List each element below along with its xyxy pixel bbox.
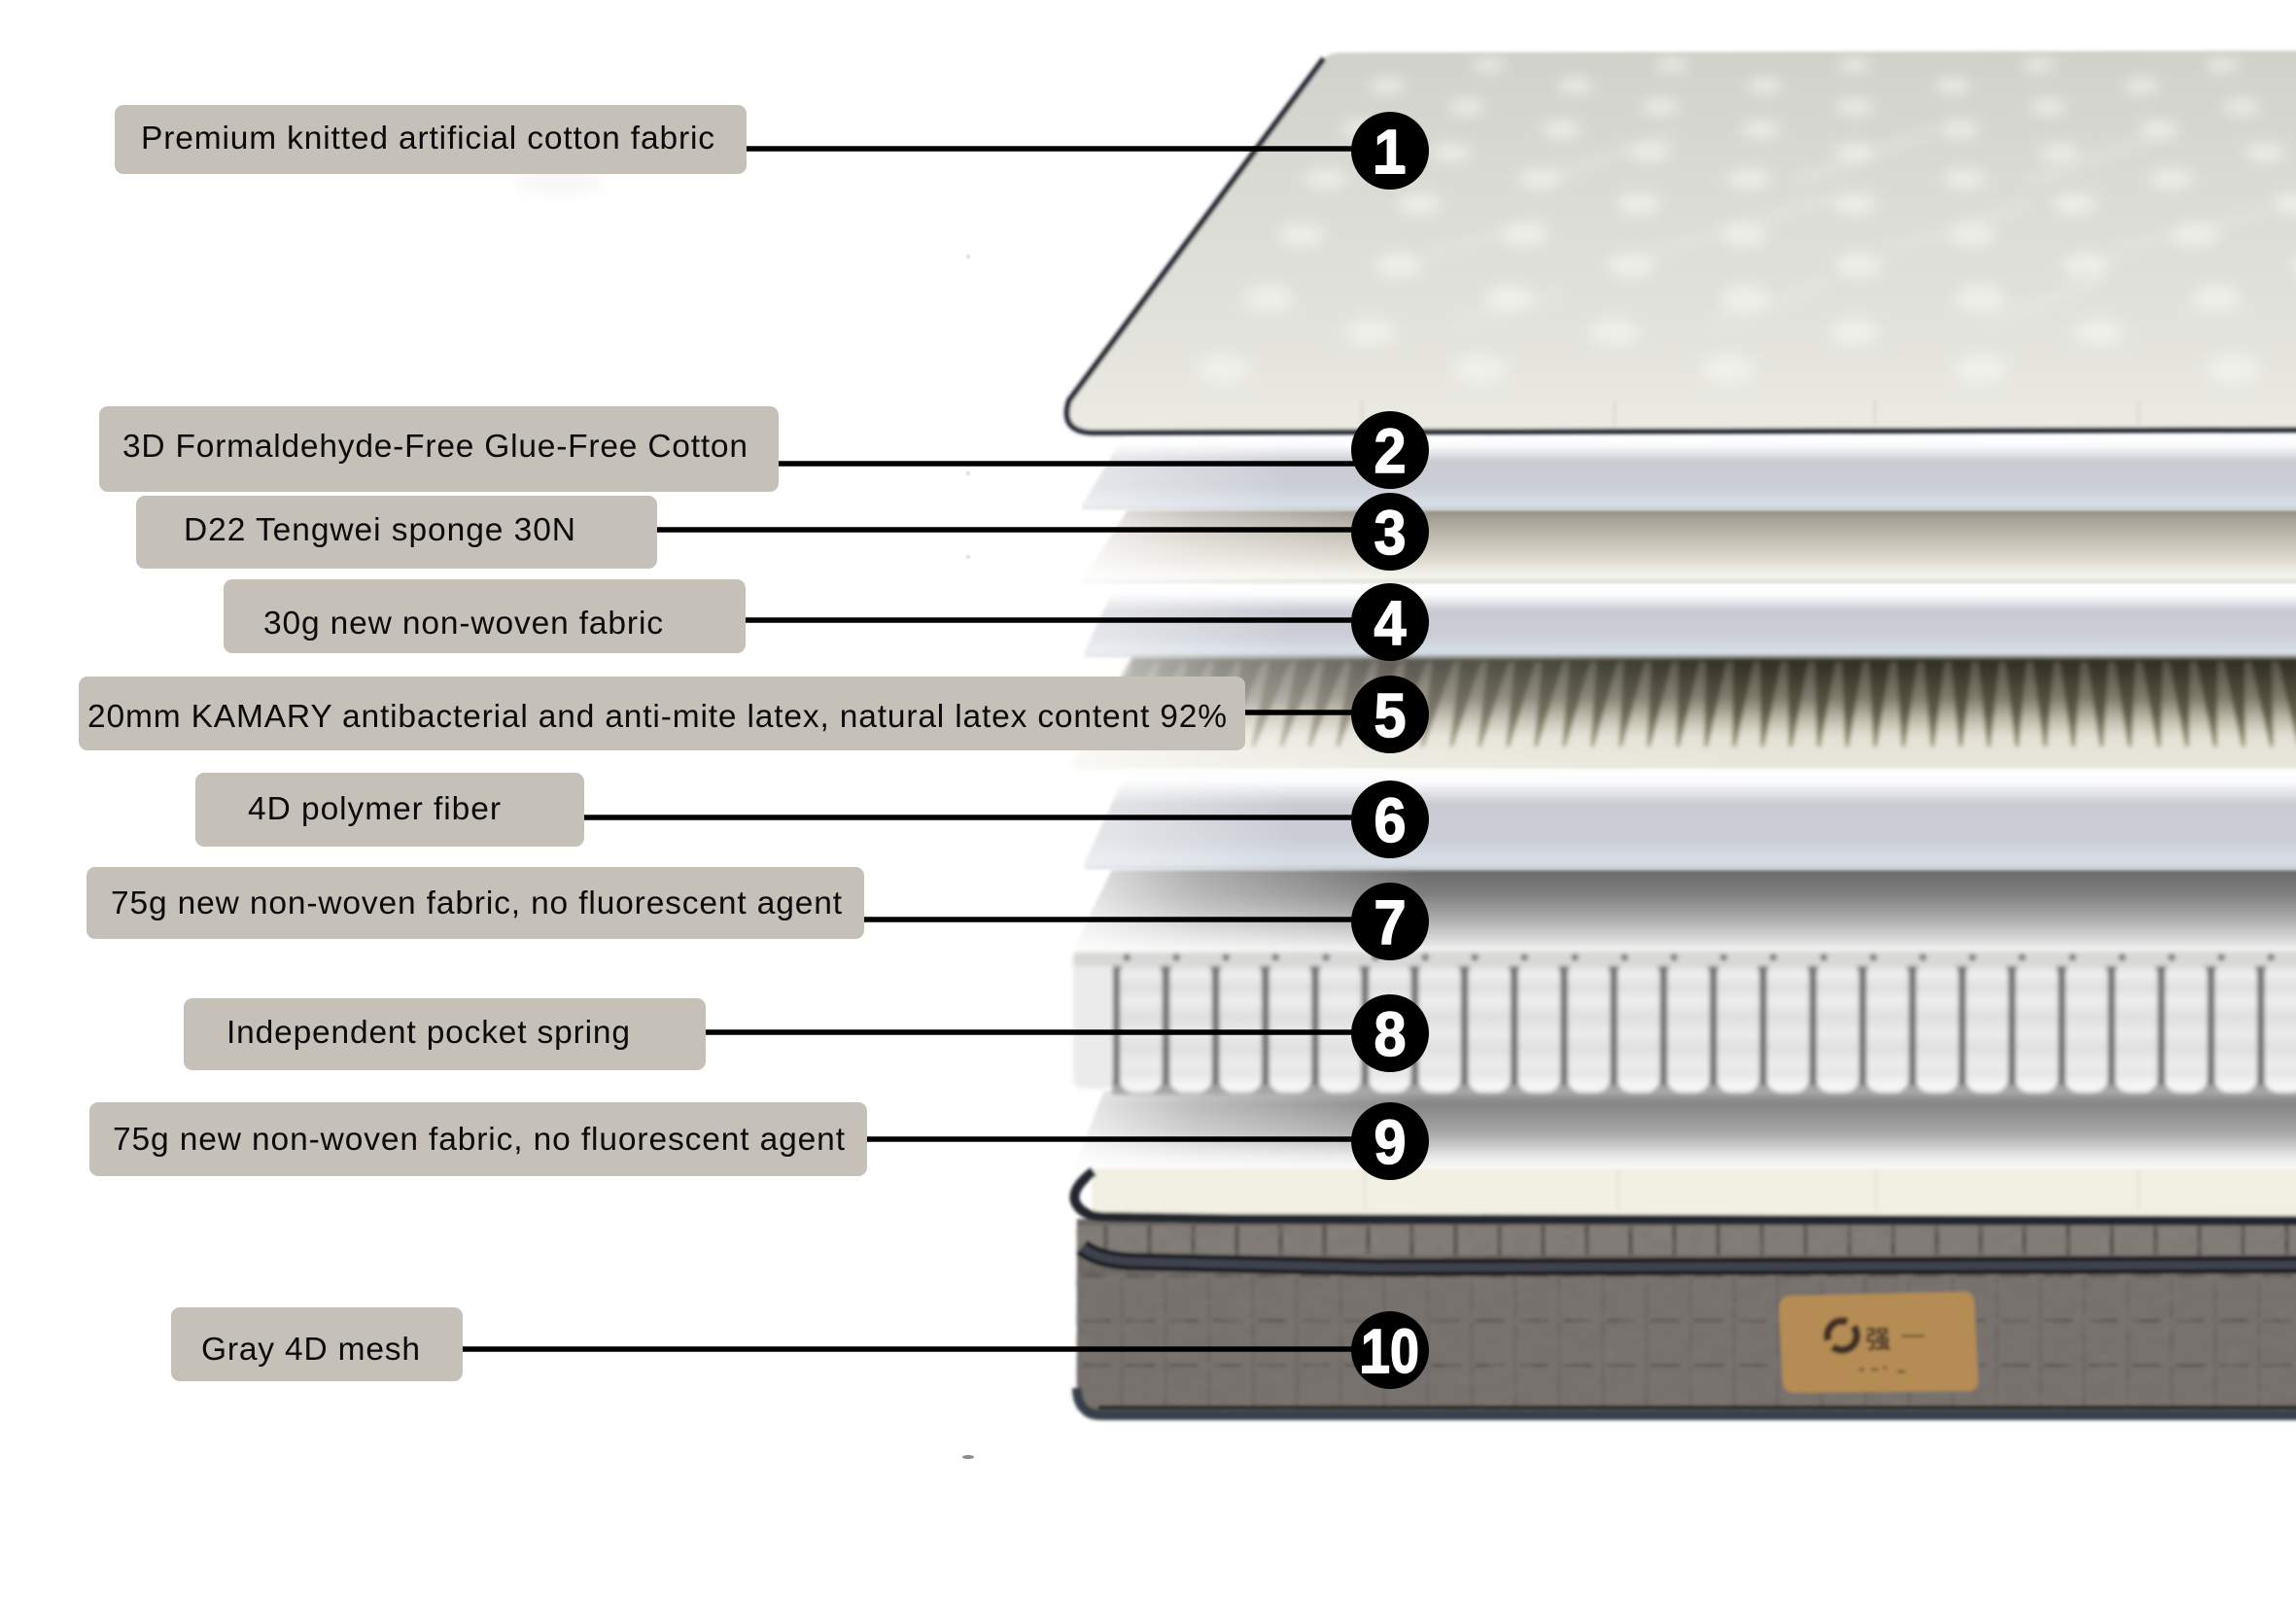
mattress illustration [1067,51,2296,1420]
cream pillow top [1092,1168,2296,1217]
quilting tufts [1198,58,2296,384]
number badge 3 [1351,493,1429,571]
number badge 4 [1351,583,1429,661]
number badge 6 [1351,781,1429,858]
brand tag: 一 [1900,1323,1926,1352]
label 4: 30g new non-woven fabric [263,606,663,642]
connector lines [462,149,1361,1349]
label 5: 20mm KAMARY antibacterial and anti-mite latex, natural latex content 92% [87,699,1227,735]
layer 8: independent pocket springs [1073,953,2296,1094]
label 6: 4D polymer fiber [248,791,501,827]
number badge 9: 9 [1374,1107,1406,1177]
label 1: Premium knitted artificial cotton fabric [141,121,714,156]
quilting creases [1427,131,2265,326]
number badge 9 [1351,1102,1429,1180]
label 5 [79,677,1245,750]
label 9 [89,1102,867,1176]
label 7: 75g new non-woven fabric, no fluorescent agent [111,885,843,921]
number badge 5: 5 [1374,680,1406,750]
label 8: Independent pocket spring [226,1015,630,1051]
layer 2: 3D cotton [1082,436,2296,509]
layer 1: quilted knitted top fabric [1067,51,2296,433]
layer 6: 4D polymer fiber [1085,770,2296,869]
number badge 6: 6 [1374,785,1406,855]
label 4 [224,579,746,653]
number badge 10: 10 [1361,1316,1419,1386]
number badge 2 [1351,411,1429,489]
number badge 1 [1351,112,1429,190]
layer 9: non-woven fabric lower [1076,1091,2296,1168]
layer 3: D22 sponge [1083,510,2296,583]
piping [1074,1171,2296,1221]
number badge 5 [1351,676,1429,753]
number badge 4: 4 [1374,588,1407,658]
layer 7: non-woven fabric upper [1075,870,2296,957]
label 7 [87,867,864,939]
label 6 [195,773,584,847]
label 2: 3D Formaldehyde-Free Glue-Free Cotton [122,429,748,465]
number badge 3: 3 [1374,498,1406,568]
layer 10: base with gray 4D mesh [1074,1168,2296,1420]
label 3: D22 Tengwei sponge 30N [184,512,575,548]
number badge 7 [1351,883,1429,960]
number badge 1: 1 [1374,117,1406,187]
brand tag: 强 [1865,1325,1891,1354]
label 8 [184,998,706,1070]
layer 5: latex [1069,657,2296,772]
number badge 7: 7 [1374,887,1406,957]
label 1 [115,105,747,174]
number badge 8 [1351,994,1429,1072]
label 3 [136,496,657,569]
background smudges [515,167,974,1459]
label 2 [99,406,779,492]
mesh side panel [1077,1219,2296,1420]
number badge 8: 8 [1374,999,1406,1069]
mesh mottling [1077,1223,2296,1407]
layer 4: non-woven fabric [1085,586,2296,657]
label 9: 75g new non-woven fabric, no fluorescent agent [113,1122,846,1158]
number badge 2: 2 [1374,416,1406,486]
brand tag [1779,1292,1978,1393]
label 10: Gray 4D mesh [201,1332,420,1368]
label 10 [171,1307,463,1381]
